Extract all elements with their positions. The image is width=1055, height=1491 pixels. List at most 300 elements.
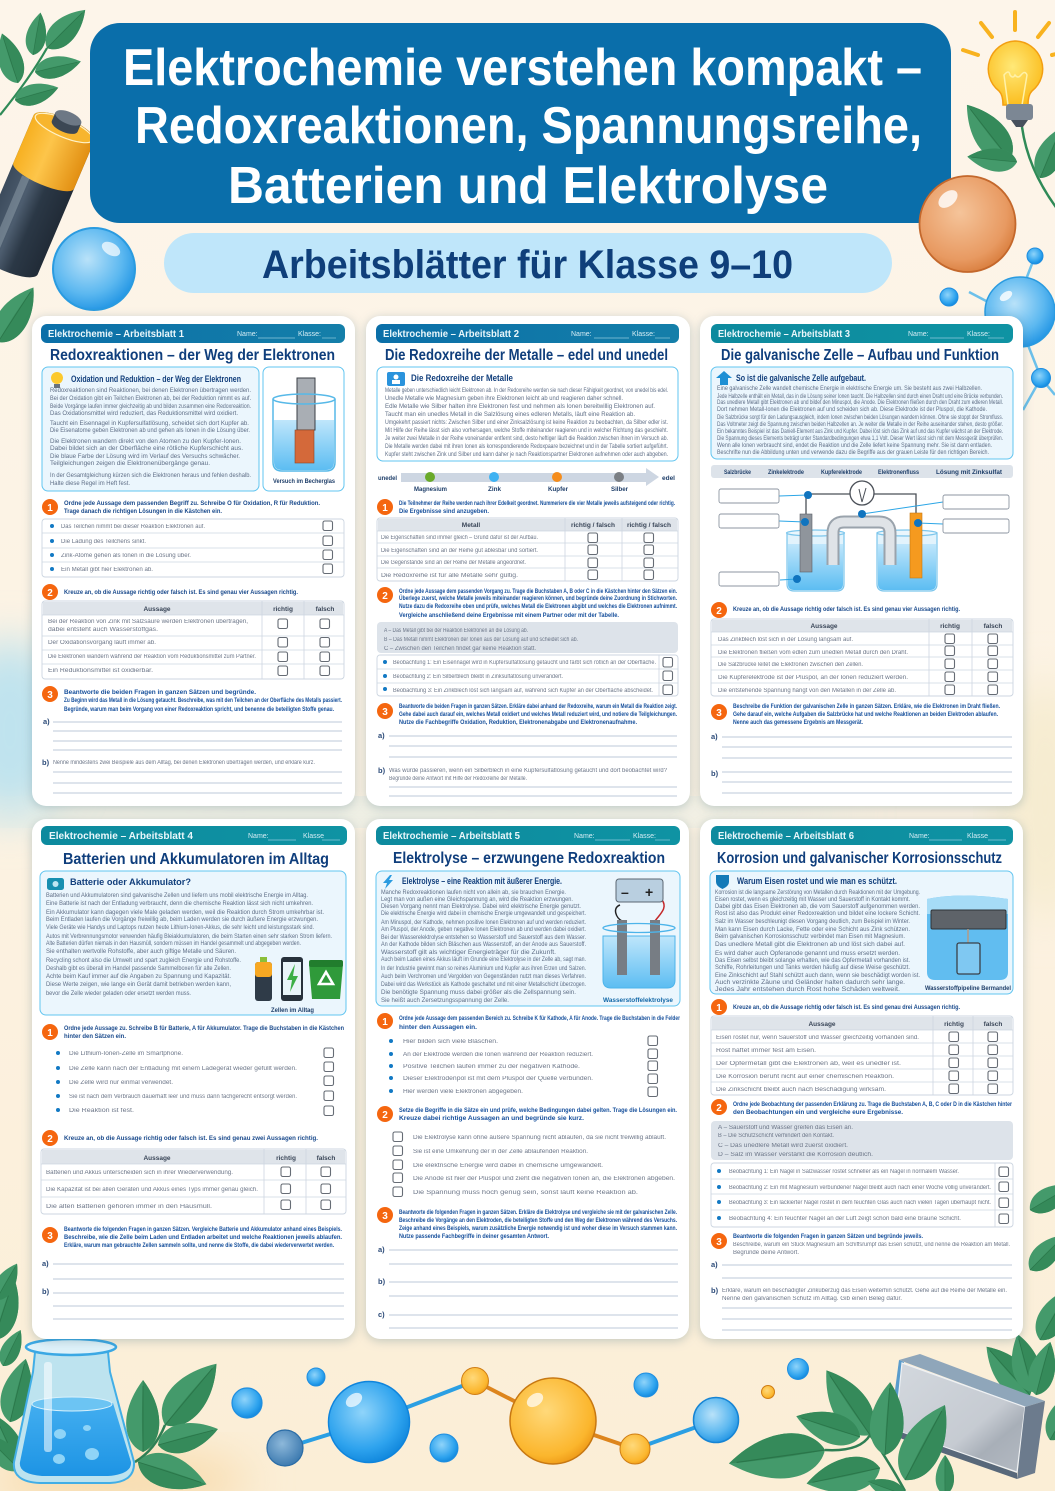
task 2: Bei der Reaktion von Zink mit Salzsäure werden Elektronen übertragen,: [48, 619, 248, 625]
task 1: Ordne jede Aussage dem passenden Begriff zu. Schreibe O für Oxidation, R für Reduktion.: [64, 500, 320, 507]
info box 5: Legt man von außen eine Gleichspannung an, wird die Reaktion erzwungen.: [381, 896, 573, 903]
task 3: 3: [716, 1237, 722, 1248]
info box 5: Bei der Wasserelektrolyse entstehen so Wasserstoff und Sauerstoff aus dem Wasser.: [381, 934, 586, 941]
decoration: orange sphere: [920, 176, 1016, 272]
task 3: a): [43, 717, 50, 726]
title 1: Redoxreaktionen – der Weg der Elektronen: [50, 347, 335, 364]
task 1: Die Ergebnisse sind anzugeben.: [399, 508, 489, 515]
task 2: Kreuze an, ob die Aussage richtig oder falsch ist. Es sind genau vier Aussagen richtig.: [733, 606, 960, 613]
task 2: C – Das unedlere Metall wird zuerst oxidiert.: [718, 1143, 848, 1149]
title 4: Batterien und Akkumulatoren im Alltag: [63, 851, 329, 868]
info box 5: Am Minuspol, der Kathode, nehmen positive Ionen Elektronen auf und werden reduziert.: [381, 919, 586, 926]
info box 4: Deshalb gibt es überall im Handel passende Sammelboxen für alte Zellen.: [46, 965, 231, 972]
task 1: 1: [382, 503, 388, 514]
header bar 6: Name:: [909, 833, 930, 840]
task 1: Die Eigenschaften sind immer gleich – Grund dafür ist der Aufbau.: [381, 535, 538, 541]
task 1: Die Zelle kann nach der Entladung mit einem Ladegerät wieder gefüllt werden.: [69, 1066, 297, 1072]
task 3: Beschreibe, warum ein Stück Magnesium am Schiffsrumpf das Eisen schützt, und nenne die Reaktion am Metall.: [733, 1242, 1010, 1248]
header bar 2: Klasse:: [632, 331, 655, 338]
task 2: Das Zinkblech löst sich in der Lösung langsam auf.: [718, 637, 853, 643]
task 1: falsch: [984, 1021, 1002, 1028]
header bar 4: [41, 826, 347, 845]
redox series arrow: Kupfer: [548, 486, 568, 493]
task 2: falsch: [317, 1155, 335, 1162]
title block: Elektrochemie verstehen kompakt –: [123, 39, 922, 97]
word bank: [711, 465, 1013, 478]
subtitle pill: Arbeitsblätter für Klasse 9–10: [262, 243, 793, 287]
task 3: b): [378, 766, 386, 775]
word bank: Zinkelektrode: [768, 469, 804, 476]
image: electrolysis setup: [603, 879, 675, 1004]
task 1: Trage danach die richtigen Lösungen in die Kästchen ein.: [64, 508, 222, 515]
redox series arrow: unedel: [378, 475, 397, 482]
word bank: Lösung mit Zinksulfat: [936, 469, 1003, 476]
icon: cells in everyday life: Zellen im Alltag: [271, 1007, 314, 1014]
task 2: Die Elektrolyse kann ohne äußere Spannung nicht ablaufen, da sie nicht freiwillig abläuft.: [413, 1135, 666, 1141]
task 3: Gehe darauf ein, welche Aufgaben die Salzbrücke hat und welche Reaktionen an beiden Elektroden ablaufen.: [733, 711, 998, 718]
task 2: Aussage: [143, 1155, 171, 1162]
task 1: 1: [716, 1003, 722, 1014]
header bar 3: Klasse:: [967, 331, 990, 338]
task 2: D – Salz im Wasser verstärkt die Korrosion deutlich.: [718, 1152, 873, 1158]
task 3: [42, 686, 342, 793]
task 2: Ein Reduktionsmittel ist oxidierbar.: [48, 668, 153, 674]
task 2: Die Kapazität ist bei allen Geräten und Akkus eines Typs immer genau gleich.: [46, 1187, 258, 1193]
info box 5: Manche Redoxreaktionen laufen nicht von allein ab, sie brauchen Energie.: [381, 889, 566, 896]
task 2: 2: [716, 1103, 722, 1114]
title 2: Die Redoxreihe der Metalle – edel und unedel: [385, 347, 668, 364]
task 1: 1: [47, 503, 53, 514]
info box 1: Die blaue Farbe der Lösung wird im Verlauf des Versuchs schwächer.: [50, 453, 240, 460]
task 2: richtig: [940, 623, 960, 630]
header bar 3: [711, 324, 1013, 343]
task 3: a): [711, 1260, 718, 1269]
header bar 3: Elektrochemie – Arbeitsblatt 3: [718, 328, 850, 340]
task 2: Überlege zuerst, welche Metalle jeweils miteinander reagieren können, und begründe deine Zuordnung in Stichworten.: [399, 593, 677, 602]
info box 4: Diese Werte zeigen, wie lange ein Gerät damit betrieben werden kann,: [46, 981, 231, 988]
redox series arrow: Magnesium: [414, 486, 447, 493]
info box 1: Oxidation und Reduktion – der Weg der Elektronen: [71, 374, 241, 384]
info box 1: Redoxreaktionen sind Reaktionen, bei denen Elektronen übertragen werden.: [50, 387, 251, 394]
task 1: Ordne jede Aussage zu. Schreibe B für Batterie, A für Akkumulator. Trage die Buchstaben in die Kästchen: [64, 1025, 344, 1032]
info box 6: [710, 871, 1013, 994]
info box 5: Dabei wird das Werkstück als Kathode geschaltet und mit einer Metallschicht überzogen.: [381, 981, 586, 988]
image: corrosion protection: [925, 896, 1011, 992]
task 1: Eisen rostet nur, wenn Sauerstoff und Wasser gleichzeitig vorhanden sind.: [716, 1035, 919, 1041]
redox series arrow: Zink: [488, 486, 501, 493]
task 2: [377, 587, 678, 696]
task 2: [377, 1106, 677, 1196]
task 3: Nutze die Fachbegriffe Oxidation, Reduktion, Elektronenabgabe und Elektronenaufnahme.: [399, 719, 637, 726]
task 2: [711, 1099, 1013, 1227]
header bar 4: Name:: [248, 833, 269, 840]
task 1: Der Opfermetall gibt die Elektronen ab, weil es unedler ist.: [716, 1061, 901, 1067]
info box 5: An der Kathode bilden sich Bläschen aus Wasserstoff, an der Anode aus Sauerstoff.: [381, 941, 586, 948]
task 2: dabei entsteht auch Wasserstoffgas.: [48, 627, 158, 633]
decoration: metal block with leaves: [726, 1175, 1055, 1491]
task 2: 2: [382, 1110, 388, 1121]
task 3: Nenne den galvanischen Schutz im Alltag. Gib einen Beleg dafür.: [722, 1296, 902, 1302]
icon: light bulb with rays: [954, 12, 1055, 210]
task 2: Kreuze an, ob die Aussage richtig oder falsch ist. Es sind genau zwei Aussagen richtig.: [64, 1135, 318, 1142]
info box 6: Jedes Jahr entstehen durch Rost hohe Schäden weltweit.: [715, 986, 900, 993]
task 1: Ein Metall gibt hier Elektronen ab.: [61, 567, 153, 573]
info box 6: Schiffe, Rohrleitungen und Tanks werden häufig auf diese Weise geschützt.: [715, 964, 910, 971]
task 1: Ordne jede Aussage dem passenden Bereich zu. Schreibe K für Kathode, A für Anode. Trage die Buchstaben in die Felder: [399, 1015, 680, 1022]
image: electrolysis setup: Wasserstoffelektrolyse: [603, 997, 673, 1004]
task 1: Die Reaktion ist fest.: [69, 1108, 134, 1114]
info box 1: [42, 367, 259, 491]
header bar 5: Klasse:: [633, 833, 656, 840]
info box 1: Beide Vorgänge laufen immer gleichzeitig ab und bilden zusammen eine Redoxreaktion.: [50, 403, 251, 410]
task 2: A – Sauerstoff und Wasser greifen das Eisen an.: [718, 1125, 853, 1131]
task 1: Die Lithium-Ionen-Zelle im Smartphone.: [69, 1051, 183, 1057]
task 1: richtig / falsch: [571, 522, 615, 529]
task 1: Positive Teilchen laufen immer zu der negativen Kathode.: [403, 1064, 580, 1070]
task 1: Aussage: [808, 1021, 836, 1028]
task 2: Beobachtung 2: Ein mit Magnesium verbundener Nagel bleibt auch nach einer Woche völlig unverändert.: [729, 1185, 991, 1191]
panel: worksheet 5: [366, 819, 689, 1339]
info box 2: Edle Metalle wie Silber halten ihre Elektronen fest und nehmen als Ionen bereitwillig Elektronen auf.: [385, 403, 655, 410]
header bar 1: Name:: [237, 331, 258, 338]
task 2: [711, 602, 1013, 696]
task 3: a): [42, 1259, 49, 1268]
info box 6: Rost ist also das Produkt einer Redoxreaktion und bildet eine lockere Schicht.: [715, 910, 920, 917]
info box 4: Beim Entladen laufen die Vorgänge freiwillig ab, beim Laden werden sie durch äußere Energie erzwungen.: [46, 916, 318, 923]
title 5: Elektrolyse – erzwungene Redoxreaktion: [393, 850, 665, 867]
header bar 1: [41, 324, 345, 343]
info box 3: Dort nehmen Metall-Ionen die Elektronen auf und scheiden sich ab. Diese Elektrode ist der Pluspol, die Kathode.: [717, 406, 987, 413]
task 2: Kreuze an, ob die Aussage richtig oder falsch ist. Es sind genau vier Aussagen richtig.: [64, 589, 298, 596]
task 2: 2: [47, 1134, 53, 1145]
icon: battery: [0, 99, 101, 284]
info box 4: Batterie oder Akkumulator?: [70, 877, 191, 887]
header bar 1: Klasse:: [298, 331, 321, 338]
task 2: Die Elektronen wandern während der Reaktion vom Reduktionsmittel zum Partner.: [48, 654, 256, 660]
header bar 1: Elektrochemie – Arbeitsblatt 1: [48, 328, 184, 340]
task 1: Die Teilnehmer der Reihe werden nach ihrer Edelkeit geordnet. Nummeriere die vier Metalle jeweils aufsteigend oder richtig.: [399, 500, 675, 507]
task 1: Kreuze an, ob die Aussage richtig oder falsch ist. Es sind genau drei Aussagen richtig.: [733, 1004, 960, 1011]
info box 3: Beschrifte nun die Abbildung unten und verwende dazu die Begriffe aus der grauen Leiste für den richtigen Bereich.: [717, 449, 989, 456]
task 3: Beantworte die beiden Fragen in ganzen Sätzen. Erkläre dabei anhand der Redoxreihe, warum ein Metall die Reaktion zeigt.: [399, 703, 677, 710]
task 1: [42, 1024, 344, 1116]
task 3: 3: [47, 1231, 53, 1242]
task 1: Die Korrosion beruht nicht auf einer chemischen Reaktion.: [716, 1074, 894, 1080]
panel: worksheet 1: [32, 316, 355, 806]
task 2: richtig: [276, 1155, 296, 1162]
task 2: Die Kupferelektrode ist der Pluspol, an der Ionen reduziert werden.: [718, 675, 908, 681]
info box 6: Es wird daher auch Opferanode genannt und muss ersetzt werden.: [715, 950, 900, 957]
info box 1: Die Elektronen wandern direkt von den Atomen zu den Kupfer-Ionen.: [50, 438, 241, 445]
task 3: 3: [382, 707, 388, 718]
task 2: [42, 584, 344, 679]
task 2: C – Zwischen den Teilchen findet gar keine Reaktion statt.: [384, 646, 536, 652]
task 1: richtig / falsch: [627, 522, 671, 529]
title block: Batterien und Elektrolyse: [228, 157, 828, 215]
task 1: Zink-Atome gehen als Ionen in die Lösung über.: [61, 553, 191, 559]
task 3: [42, 1226, 344, 1319]
icon: erlenmeyer flask: [14, 1339, 134, 1483]
task 2: den Beobachtungen ein und vergleiche eure Ergebnisse.: [733, 1109, 903, 1116]
redox series arrow: Silber: [611, 486, 628, 493]
decoration: blue sphere: [53, 228, 135, 310]
info box 4: Recycling schont also die Umwelt und spart zugleich Energie und Rohstoffe.: [46, 957, 241, 964]
task 2: B – Die Schutzschicht verhindert den Kontakt.: [718, 1133, 834, 1139]
diagram: galvanic cell: [719, 481, 1009, 591]
header bar 2: Elektrochemie – Arbeitsblatt 2: [383, 328, 519, 340]
task 1: Die Gegenstände sind an der Reihe der Metalle angeordnet.: [381, 560, 526, 566]
info box 2: Taucht man ein unedles Metall in die Salzlösung eines edleren Metalls, läuft eine Reaktion ab.: [385, 411, 635, 418]
task 3: Was würde passieren, wenn ein Silberblech in eine Kupfersulfatlösung getaucht und dort beobachtet wird?: [389, 768, 668, 774]
task 3: b): [711, 769, 719, 778]
task 3: Begründe deine Antwort.: [733, 1250, 799, 1256]
header bar 4: Klasse: [303, 833, 324, 840]
task 3: Beantworte die folgenden Fragen in ganzen Sätzen. Erkläre die Elektrolyse und vergleiche sie mit der galvanischen Zelle.: [399, 1209, 677, 1216]
task 3: [711, 1233, 1012, 1330]
subtitle pill: [164, 233, 892, 293]
task 1: Metall: [462, 522, 480, 529]
task 3: [377, 1207, 678, 1328]
task 3: a): [711, 732, 718, 741]
task 3: Beantworte die beiden Fragen in ganzen Sätzen und begründe.: [64, 689, 256, 696]
redox series arrow: edel: [662, 475, 675, 482]
info box 6: Dabei gibt das Eisen Elektronen ab, die vom Sauerstoff aufgenommen werden.: [715, 903, 920, 910]
header bar 6: [711, 826, 1013, 845]
task 1: richtig: [944, 1021, 964, 1028]
info box 1: Taucht ein Eisennagel in Kupfersulfatlösung, scheidet sich dort Kupfer ab.: [50, 420, 249, 427]
header bar 5: Elektrochemie – Arbeitsblatt 5: [383, 830, 520, 842]
task 1: [711, 999, 1013, 1095]
task 3: a): [378, 731, 385, 740]
info box 4: Ein Akkumulator kann dagegen viele Male geladen werden, weil die Reaktion durch Strom umkehrbar ist.: [46, 909, 324, 916]
task 1: Rost haftet immer fest am Eisen.: [716, 1048, 816, 1054]
word bank: Kupferelektrode: [821, 469, 862, 476]
panel: worksheet 2: [366, 316, 690, 806]
info box 6: Eine Zinkschicht auf Stahl schützt auch dann, wenn sie beschädigt worden ist.: [715, 972, 920, 979]
info box 2: Die Metalle werden dabei mit ihren Ionen als korrespondierende Redoxpaare bezeichnet und in der Tabelle sortiert aufgeführt.: [385, 443, 668, 450]
info box 1: Bei der Oxidation gibt ein Teilchen Elektronen ab, bei der Reduktion nimmt es auf.: [50, 395, 251, 402]
header bar 6: Klasse: [967, 833, 988, 840]
header bar 5: Name:: [574, 833, 595, 840]
info box 2: Kupfer steht zwischen Zink und Silber und kann daher je nach Reaktionspartner Elektronen aufnehmen oder auch abgeben.: [385, 451, 668, 458]
info box 2: Die Redoxreihe der Metalle: [411, 373, 513, 383]
task 1: 1: [382, 1017, 388, 1028]
panel: worksheet 6: [700, 819, 1023, 1339]
task 2: Setze die Begriffe in die Sätze ein und prüfe, welche Bedingungen dabei gelten. Trage die Lösungen ein.: [399, 1107, 677, 1114]
info box 4: Alte Batterien dürfen niemals in den Hausmüll, sondern müssen im Handel gesammelt und abgegeben werden.: [46, 940, 301, 947]
header bar 2: Name:: [571, 331, 592, 338]
redox series arrow: [378, 468, 675, 493]
info box 5: Sie heißt auch Zersetzungsspannung der Zelle.: [381, 997, 509, 1004]
info box 5: Die elektrische Energie wird dabei in chemische Energie umgewandelt und gespeichert.: [381, 910, 586, 917]
task 3: a): [378, 1245, 385, 1254]
info box 5: Diesen Vorgang nennt man Elektrolyse. Dabei wird elektrische Energie genutzt.: [381, 903, 581, 910]
task 2: Die Salzbrücke leitet die Elektronen zwischen den Zellen.: [718, 662, 863, 668]
info box 4: Viele Geräte wie Handys und Laptops nutzen heute Lithium-Ionen-Akkus, die sehr leicht und leistungsstark sind.: [46, 924, 314, 931]
task 2: 2: [382, 591, 388, 602]
task 3: Zeige anhand eines Beispiels, warum zusätzliche Energie notwendig ist und woher diese im Versuch stammen kann.: [399, 1225, 677, 1232]
task 2: 2: [716, 606, 722, 617]
info box 1: Das Oxidationsmittel wird reduziert, das Reduktionsmittel wird oxidiert.: [50, 410, 238, 417]
task 1: Die Eigenschaften sind an der Reihe gut ablesbar und sortiert.: [381, 548, 538, 554]
task 1: Die Zinkschicht bleibt auch nach Beschädigung wirksam.: [716, 1087, 886, 1093]
task 2: falsch: [984, 623, 1002, 630]
decoration: top-left leaves: [0, 1, 94, 350]
task 1: [377, 499, 678, 581]
title 3: Die galvanische Zelle – Aufbau und Funktion: [721, 347, 999, 364]
word bank: Salzbrücke: [724, 469, 751, 476]
info box 5: Elektrolyse – eine Reaktion mit äußerer Energie.: [402, 876, 562, 886]
task 3: Erkläre, warum ein beschädigter Zinküberzug das Eisen weiterhin schützt. Gehe auf die Reihe der Metalle ein.: [722, 1288, 1007, 1294]
task 2: Die Elektronen fließen vom edlen zum unedlen Metall durch den Draht.: [718, 650, 908, 656]
task 3: Begründe, warum man beim Vorgang von einer Redoxreaktion spricht, und benenne die beteiligten Stoffe genau.: [64, 706, 334, 713]
image box: beaker experiment: Versuch im Becherglas: [273, 478, 335, 485]
task 2: Beobachtung 3: Ein Zinkblech löst sich langsam auf, während sich Kupfer an der Oberfläche abscheidet.: [393, 688, 653, 694]
task 3: Begründe deine Antwort mit Hilfe der Redoxreihe der Metalle.: [389, 776, 527, 782]
task 2: Beobachtung 1: Ein Nagel in Salzwasser rostet schneller als ein Nagel in normalem Wasser.: [729, 1169, 959, 1175]
info box 2: Unedle Metalle wie Magnesium geben ihre Elektronen leicht ab und reagieren daher schnell.: [385, 395, 623, 402]
info box 3: So ist die galvanische Zelle aufgebaut.: [736, 373, 866, 383]
task 3: [711, 703, 1012, 793]
info box 6: Warum Eisen rostet und wie man es schützt.: [737, 876, 897, 886]
task 3: 3: [382, 1211, 388, 1222]
task 3: Nenne mindestens zwei Beispiele aus dem Alltag, bei denen Elektronen übertragen werden, und erkläre kurz.: [53, 760, 315, 766]
header bar 4: Elektrochemie – Arbeitsblatt 4: [49, 830, 193, 842]
task 2: Der Oxidationsvorgang läuft immer ab.: [48, 640, 156, 646]
header bar 5: [376, 826, 680, 845]
info box 1: Teilgleichungen zeigen die Elektronenübergänge genau.: [50, 460, 210, 467]
task 2: Die elektrische Energie wird dabei in chemische umgewandelt.: [413, 1163, 603, 1169]
info box 4: Sie enthalten wertvolle Rohstoffe, aber auch giftige Metalle und Säuren.: [46, 948, 236, 955]
info box 1: Die Eisenatome geben Elektronen ab und gehen als Ionen in die Lösung über.: [50, 427, 250, 434]
info box 6: Das unedlere Metall gibt die Elektronen ab und löst sich dabei auf.: [715, 941, 905, 948]
info box 3: Wenn alle Ionen verbraucht sind, endet die Reaktion und die Zelle liefert keine Spannung mehr. Sie ist dann entladen.: [717, 442, 992, 449]
task 2: Die alten Batterien gehören immer in den Hausmüll.: [46, 1204, 212, 1210]
info box 6: Das Eisen selbst bleibt solange erhalten, wie das Opfermetall vorhanden ist.: [715, 957, 910, 964]
info box 5: Auch beim Laden eines Akkus läuft im Grunde eine Elektrolyse in der Zelle ab, sagt man.: [381, 956, 586, 963]
task 2: A – Das Metall gibt bei der Reaktion Elektronen an die Lösung ab.: [384, 628, 528, 634]
header bar 2: [376, 324, 679, 343]
task 3: Gehe dabei auch darauf ein, welches Metall oxidiert und welches Metall reduziert wird, und notiere die Teilgleichungen.: [399, 711, 677, 718]
task 2: Sie ist eine Umkehrung der in der Zelle ablaufenden Reaktion.: [413, 1149, 588, 1155]
task 2: Beobachtung 3: Ein lackierter Nagel rostet in dem feuchten Glas auch nach vielen Tagen überhaupt nicht.: [729, 1200, 991, 1206]
decoration: bottom molecule chain: [232, 1358, 808, 1466]
task 2: 2: [47, 588, 53, 599]
task 1: Hier bilden sich viele Bläschen.: [403, 1039, 498, 1045]
task 2: Aussage: [810, 623, 838, 630]
task 2: richtig: [273, 606, 293, 613]
image: electrolysis setup: +: [645, 884, 653, 900]
info box 4: bevor die Zelle wieder geladen oder ersetzt werden muss.: [46, 990, 191, 997]
task 1: 1: [47, 1028, 53, 1039]
info box 6: Man kann Eisen durch Lacke, Fette oder eine Schicht aus Zink schützen.: [715, 926, 910, 933]
info box 2: Je weiter zwei Metalle in der Reihe voneinander entfernt sind, desto heftiger läuft die Reaktion zwischen ihnen im Versuch ab.: [385, 435, 668, 442]
task 1: An der Elektrode werden die Ionen während der Reaktion reduziert.: [403, 1052, 593, 1058]
panel: worksheet 4: [32, 819, 355, 1339]
task 2: Aussage: [143, 606, 171, 613]
task 2: Beobachtung 2: Ein Silberblech bleibt in Zinksulfatlösung unverändert.: [393, 674, 563, 680]
info box 4: Batterien und Akkumulatoren sind galvanische Zellen und liefern uns mobil elektrische Energie im Alltag.: [46, 892, 308, 899]
task 3: b): [42, 1287, 50, 1296]
info box 4: Achte beim Kauf immer auf die Angaben zu Spannung und Kapazität.: [46, 973, 231, 980]
task 1: Sie ist nach dem Verbrauch dauerhaft leer und muss dann fachgerecht entsorgt werden.: [69, 1094, 297, 1100]
info box 4: Eine Batterie ist nach der Entladung verbraucht, denn die chemische Reaktion lässt sich nicht umkehren.: [46, 900, 313, 907]
info box 2: Umgekehrt passiert nichts: Zwischen Silber und einer Zinksalzlösung ist keine Reaktion zu beobachten, da Silber edler ist.: [385, 419, 668, 426]
header bar 3: Name:: [908, 331, 929, 338]
task 2: Die Spannung muss hoch genug sein, sonst läuft keine Reaktion ab.: [413, 1190, 638, 1196]
info box 3: Eine galvanische Zelle wandelt chemische Energie in elektrische Energie um. Sie besteht aus zwei Halbzellen.: [717, 385, 982, 392]
task 3: c): [378, 1310, 385, 1319]
task 2: Nutze dazu die Redoxreihe oben und prüfe, welches Metall die Elektronen abgibt und welches die Elektronen aufnimmt.: [399, 603, 677, 610]
task 2: Kreuze dabei richtige Aussagen an und begründe sie kurz.: [399, 1115, 584, 1122]
task 1: Die Zelle wird nur einmal verwendet.: [69, 1080, 173, 1086]
info box 5: Die benötigte Spannung muss dabei größer als die Zellspannung sein.: [381, 989, 576, 996]
info box 5: In der Industrie gewinnt man so reines Aluminium und Kupfer aus ihren Erzen und Salzen.: [381, 965, 586, 972]
info box 4: Autos mit Verbrennungsmotor verwenden häufig Bleiakkumulatoren, die beim Starten einen sehr starken Strom liefern.: [46, 933, 332, 940]
task 2: Beobachtung 4: Ein feuchter Nagel an der Luft zeigt schon bald eine braune Schicht.: [729, 1216, 961, 1222]
info box 2: Metalle geben unterschiedlich leicht Elektronen ab. In der Redoxreihe werden sie nach dieser Fähigkeit geordnet, von unedel bis edel.: [385, 387, 668, 394]
decoration: right molecule: [940, 248, 1055, 410]
info box 1: Dabei bildet sich an der Oberfläche eine rötliche Kupferschicht aus.: [50, 445, 243, 452]
task 2: Die Anode ist hier der Pluspol und zieht die negativen Ionen an, die Elektronen abgeben.: [413, 1176, 675, 1182]
title block: Redoxreaktionen, Spannungsreihe,: [135, 97, 922, 155]
task 3: Erkläre, warum man gebrauchte Zellen sammeln sollte, und nenne die Stoffe, die dabei wiederverwertet werden.: [64, 1242, 334, 1249]
info box 5: [376, 871, 680, 1006]
task 1: Hier werden viele Elektronen abgegeben.: [403, 1089, 523, 1095]
task 1: Die Ladung des Teilchens sinkt.: [61, 539, 146, 545]
word bank: Elektronenfluss: [878, 469, 919, 476]
info box 3: [711, 367, 1013, 459]
info box 6: Korrosion ist die langsame Zerstörung von Metallen durch Reaktionen mit der Umgebung.: [715, 889, 920, 896]
task 3: Nutze passende Fachbegriffe in deiner gesamten Antwort.: [399, 1233, 549, 1240]
task 2: B – Das Metall nimmt Elektronen der Ionen aus der Lösung auf und scheidet sich ab.: [384, 637, 578, 643]
task 3: b): [378, 1277, 386, 1286]
info box 6: Auch verzinkte Zäune und Geländer halten dadurch sehr lange.: [715, 979, 905, 986]
icon: cells in everyday life: [255, 957, 343, 1014]
task 2: Vergleiche anschließend deine Ergebnisse mit einem Partner oder mit der Tabelle.: [399, 612, 619, 619]
info box 5: Auch beim Verchromen und Vergolden von Gegenständen nutzt man dieses Verfahren.: [381, 973, 586, 980]
task 3: Zu Beginn wird das Metall in die Lösung getaucht. Beschreibe, was mit den Teilchen an der Oberfläche des Metalls passiert.: [64, 697, 342, 704]
task 3: b): [711, 1286, 719, 1295]
title block: [90, 23, 951, 223]
info box 6: Beim galvanischen Korrosionsschutz verbindet man Eisen mit Magnesium.: [715, 933, 905, 940]
task 2: Batterien und Akkus unterscheiden sich in ihrer Wiederverwendung.: [46, 1170, 233, 1176]
info box 6: Eisen rostet, wenn es gleichzeitig mit Wasser und Sauerstoff in Kontakt kommt.: [715, 896, 910, 903]
task 3: b): [42, 758, 50, 767]
task 2: Beobachtung 1: Ein Eisennagel wird in Kupfersulfatlösung getaucht und färbt sich rötlich an der Oberfläche.: [393, 660, 656, 666]
info box 4: [40, 871, 346, 1015]
info box 2: Mit Hilfe der Reihe lässt sich also vorhersagen, welche Stoffe miteinander reagieren und in welcher Richtung das geschieht.: [385, 427, 668, 434]
info box 1: In der Gesamtgleichung kürzen sich die Elektronen heraus und fehlen deshalb.: [50, 472, 251, 479]
info box 5: Am Pluspol, der Anode, geben negative Ionen Elektronen ab und werden dabei oxidiert.: [381, 926, 586, 933]
task 2: Ordne jede Aussage dem passenden Vorgang zu. Trage die Buchstaben A, B oder C in die Kästchen hinter den Sätzen ein.: [399, 588, 677, 595]
decoration: bottom-left leaves: [0, 1259, 230, 1491]
task 2: falsch: [316, 606, 334, 613]
task 1: Dieser Elektrodenpol ist mit dem Pluspol der Quelle verbunden.: [403, 1076, 593, 1082]
task 3: Beantworte die folgenden Fragen in ganzen Sätzen. Vergleiche Batterie und Akkumulator anhand eines Beispiels.: [64, 1226, 342, 1233]
info box 1: Halte diese Regel im Heft fest.: [50, 480, 130, 487]
task 2: Die entstehende Spannung hängt von den Metallen in der Zelle ab.: [718, 688, 896, 694]
task 3: Beantworte die folgenden Fragen in ganzen Sätzen und begründe jeweils.: [733, 1233, 923, 1240]
task 1: hinter den Aussagen ein.: [399, 1024, 477, 1031]
task 3: 3: [716, 708, 722, 719]
task 1: Das Teilchen nimmt bei dieser Reaktion Elektronen auf.: [61, 524, 205, 530]
info box 5: Wasserstoff gilt als wichtiger Energieträger für die Zukunft.: [381, 949, 556, 956]
task 1: Die Redoxreihe ist für alle Metalle sehr gültig.: [381, 573, 518, 579]
task 2: [41, 1130, 346, 1214]
info box 6: Salz im Wasser beschleunigt diesen Vorgang deutlich, zum Beispiel im Winter.: [715, 918, 910, 925]
panel: worksheet 3: [700, 316, 1023, 806]
